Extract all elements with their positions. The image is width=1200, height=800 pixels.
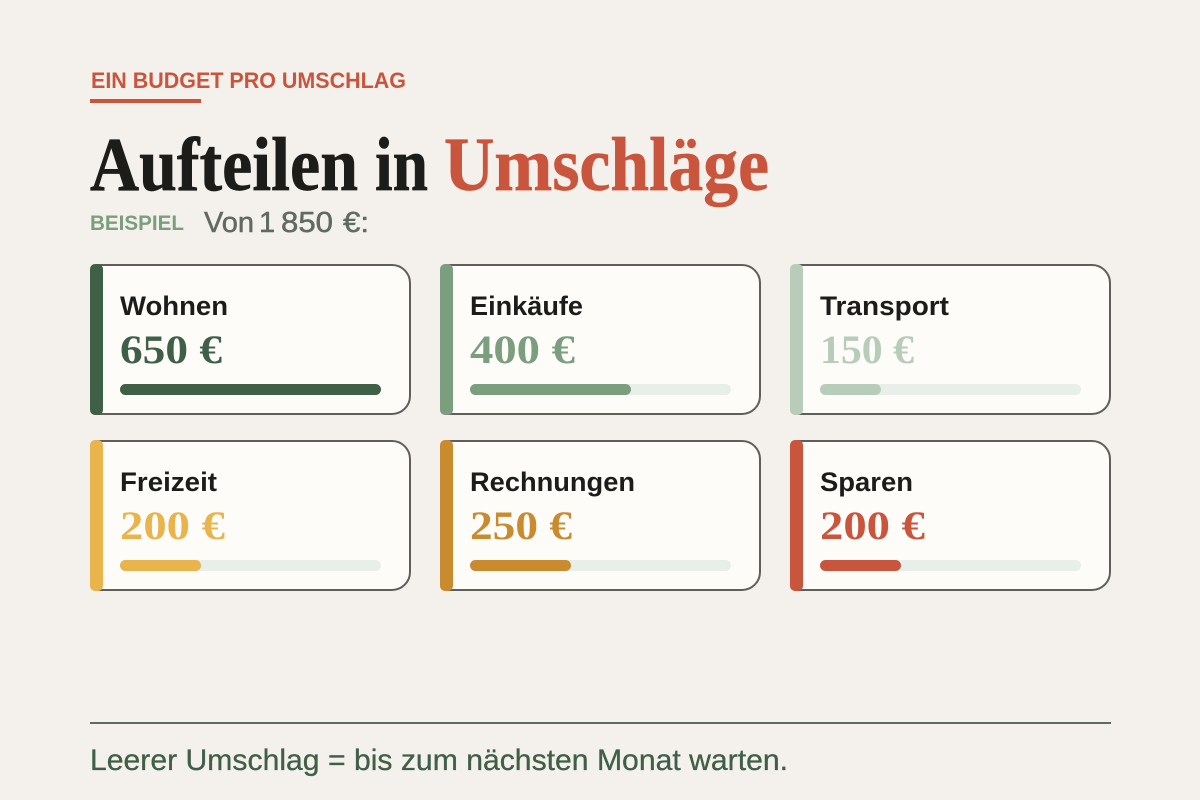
subtitle (90, 207, 369, 239)
panel: Sparen: Sparen (820, 467, 913, 497)
panel: Freizeit: 200 € (120, 503, 225, 548)
footer note: Leerer Umschlag = bis zum nächsten Monat warten. (90, 744, 788, 777)
panel: Wohnen: 650 € (120, 327, 222, 372)
title: Aufteilen (90, 123, 358, 207)
panel: Einkäufe: 400 € (470, 327, 575, 372)
panel: Wohnen (90, 264, 410, 415)
eyebrow label (90, 68, 406, 103)
panel: Transport (790, 264, 1110, 415)
eyebrow label: EIN BUDGET PRO UMSCHLAG (91, 68, 406, 93)
panel: Rechnungen (440, 440, 760, 591)
panel: Rechnungen: Rechnungen (470, 467, 635, 497)
subtitle: Von (204, 207, 254, 239)
panel: Einkäufe (440, 264, 760, 415)
panel: Freizeit (90, 440, 410, 591)
subtitle: 850 (281, 207, 333, 239)
panel: Sparen (790, 440, 1110, 591)
panel: Rechnungen: 250 € (470, 503, 572, 548)
title (90, 123, 769, 207)
title: in (375, 123, 428, 207)
panel: Sparen: 200 € (820, 503, 925, 548)
panel: Transport: 150 € (820, 327, 914, 372)
panel: Wohnen: Wohnen (120, 291, 228, 321)
subtitle: BEISPIEL (90, 212, 184, 235)
panel: Freizeit: Freizeit (120, 467, 217, 497)
panel: Transport: Transport (820, 291, 949, 321)
title: Umschläge (444, 123, 769, 207)
subtitle: 1 (259, 207, 275, 239)
panel: Einkäufe: Einkäufe (470, 291, 583, 321)
subtitle: €: (343, 207, 369, 239)
